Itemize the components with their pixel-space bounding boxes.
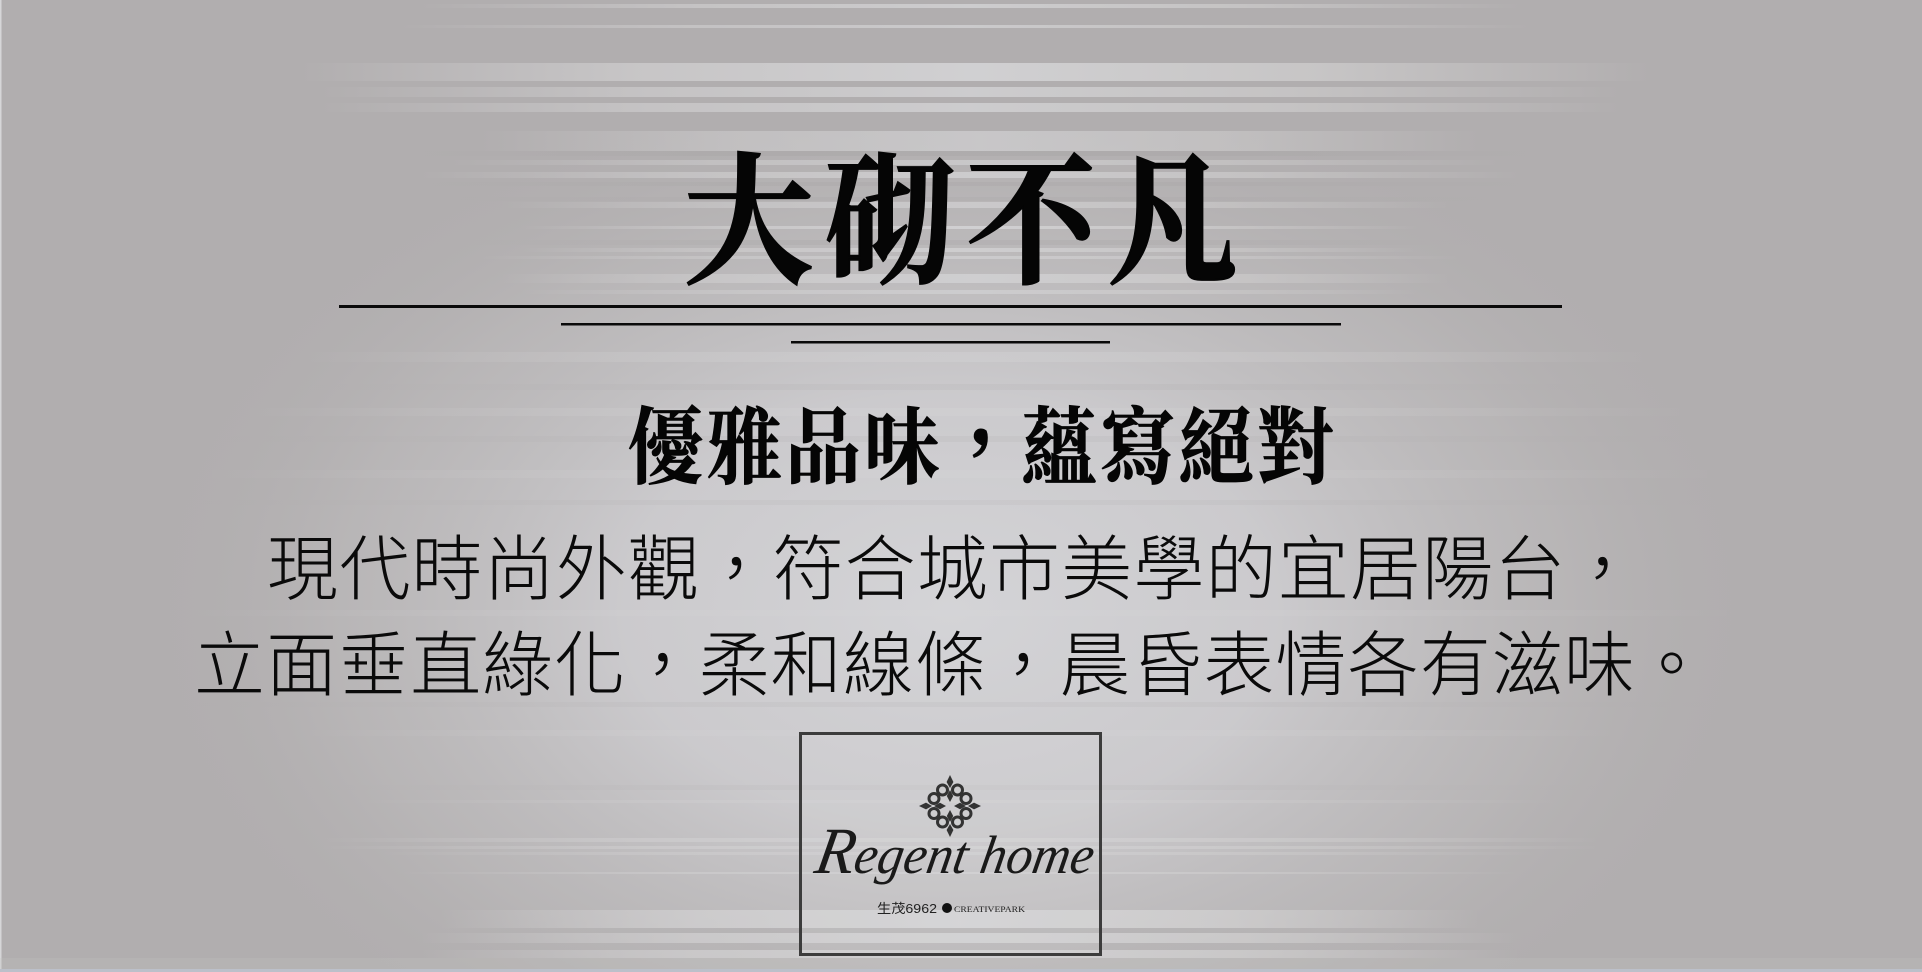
logo small print (877, 901, 1025, 916)
logo small print: 生茂6962 (877, 901, 937, 916)
logo frame (800, 734, 1100, 954)
subtitle: 優雅品味，蘊寫絕對 (628, 403, 1336, 496)
logo wordmark: Regent home (809, 815, 1101, 888)
body text: 現代時尚外觀，符合城市美學的宜居陽台， (267, 531, 1639, 610)
title: 大砌不凡 (684, 147, 1248, 303)
decorative triple rule under title (339, 305, 1562, 344)
body text (194, 531, 1708, 706)
logo small print: CREATIVEPARK (954, 905, 1025, 914)
body text: 立面垂直綠化，柔和線條，晨昏表情各有滋味。 (194, 627, 1708, 706)
logo panel (800, 734, 1101, 954)
icon: ornament (919, 775, 981, 837)
